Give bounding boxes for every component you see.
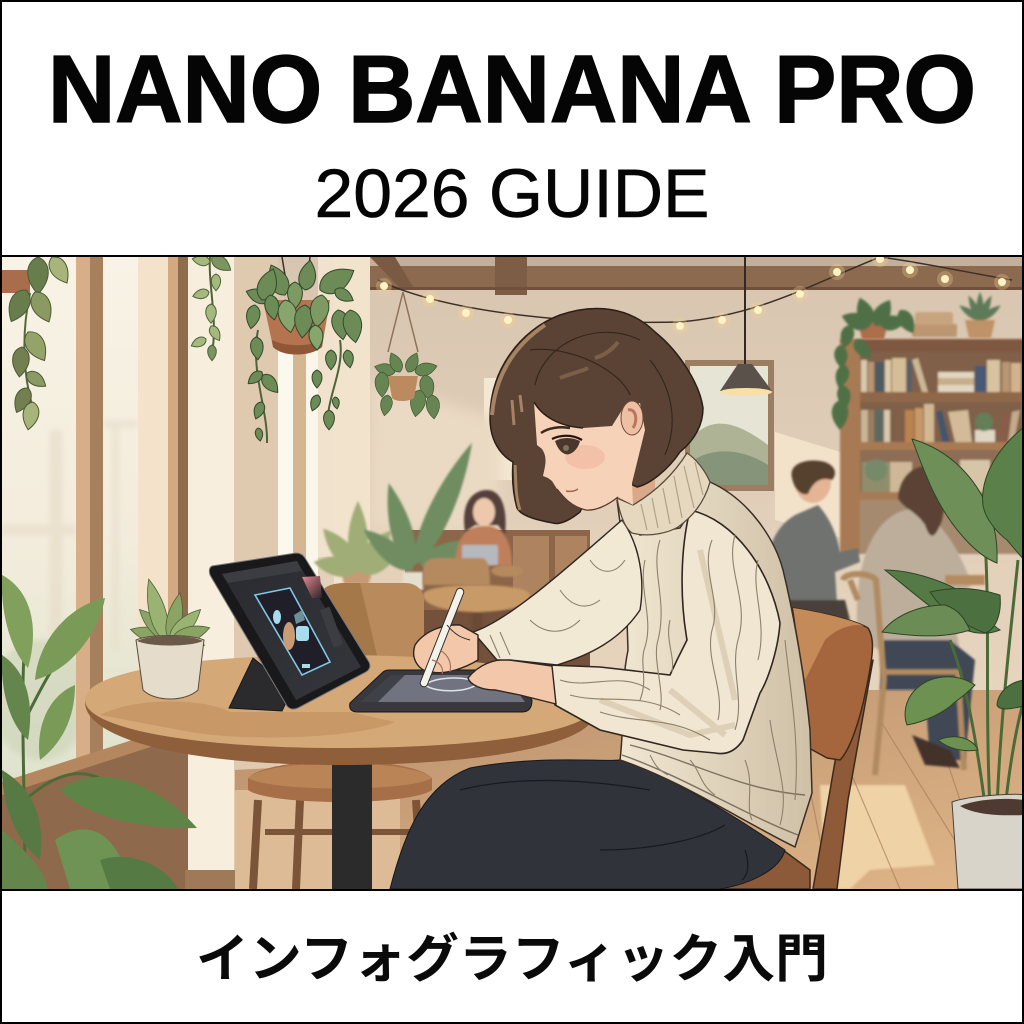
bookcase — [840, 339, 1024, 554]
trousers — [390, 760, 785, 889]
turtleneck collar — [617, 453, 710, 535]
hanging plant with terracotta pot — [244, 257, 365, 443]
hair highlights — [492, 325, 672, 510]
near arm sleeve — [548, 510, 780, 754]
far arm sleeve — [473, 520, 642, 665]
drawing tablet on table — [350, 670, 532, 712]
neck — [616, 479, 655, 504]
large plant right with pot — [882, 427, 1024, 889]
background man at table — [768, 461, 860, 620]
cable knit lines — [560, 534, 797, 826]
cafe wall — [2, 257, 1022, 782]
background person with laptop — [423, 490, 512, 585]
pendant lamp — [720, 257, 772, 396]
subtitle: 2026 GUIDE — [314, 155, 710, 232]
footer caption: インフォグラフィック入門 — [196, 931, 828, 989]
standing tablet — [209, 553, 370, 711]
stool beneath table — [248, 761, 432, 889]
hand with stylus — [414, 592, 478, 683]
chair behind woman — [723, 607, 874, 889]
sunlit wall patches — [370, 378, 850, 540]
table leg — [332, 755, 372, 889]
hair back silhouette — [490, 308, 703, 523]
background floor — [235, 690, 1024, 889]
hanging vine — [190, 257, 232, 362]
ceiling beams — [370, 257, 1024, 295]
wood wainscot — [405, 530, 590, 666]
title: NANO BANANA PRO — [48, 36, 976, 143]
woman's sweater body — [617, 482, 812, 847]
face — [534, 401, 645, 510]
hanging plant top left — [2, 257, 68, 430]
round table top — [85, 655, 595, 765]
small hanging plant on rope — [373, 292, 441, 419]
potted plant on table — [129, 577, 212, 699]
large plant lower left — [2, 575, 197, 889]
illustration frame lines — [0, 256, 1024, 890]
shelf-top plants and boxes — [832, 292, 1003, 430]
framed picture — [685, 360, 774, 491]
near hand — [468, 660, 556, 704]
background woman in hoodie — [857, 466, 985, 768]
left window with frames — [0, 257, 370, 889]
main table wooden chair — [324, 583, 424, 657]
illustration: woman working in a cafe — [0, 251, 1024, 889]
background plants — [312, 438, 483, 590]
string lights — [376, 251, 1012, 334]
background round table — [423, 565, 530, 644]
wooden cafe chair behind — [843, 574, 964, 775]
